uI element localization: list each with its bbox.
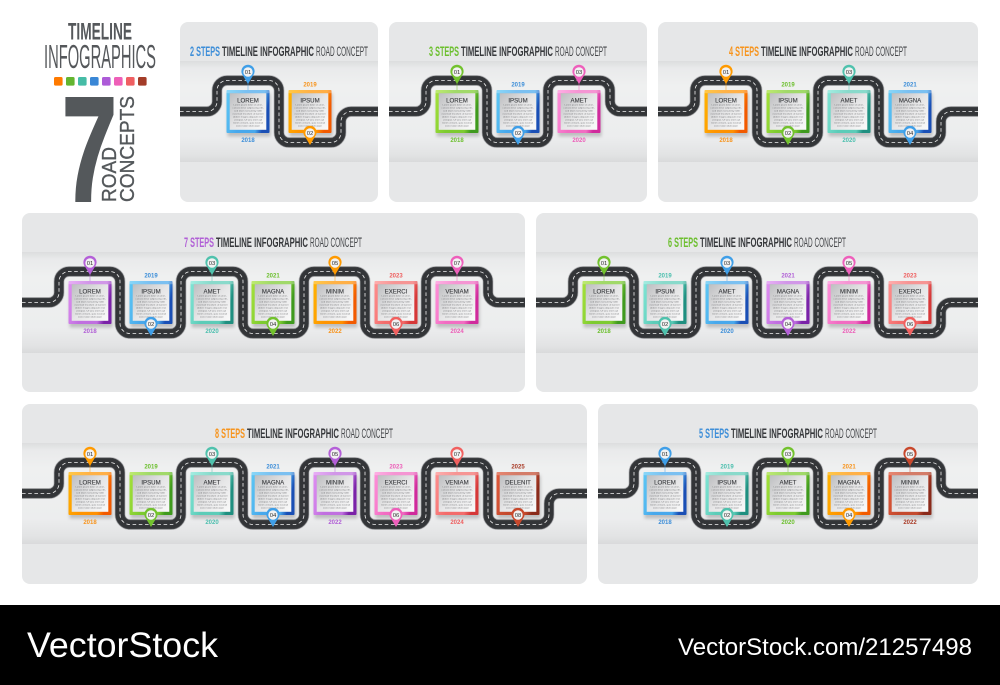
panel heading: 3 steps: 3 STEPS: [429, 43, 459, 59]
card: MINIM 2022: [828, 256, 872, 335]
panel heading: 8 steps: TIMELINE INFOGRAPHIC: [247, 425, 339, 441]
card: MINIM 2022: MINIM: [901, 480, 919, 486]
card: VENIAM 2024: VENIAM: [445, 288, 469, 296]
card: EXERCI 2023: [888, 273, 932, 336]
card: MAGNA 2021: [766, 273, 810, 336]
card: LOREM 2018: [436, 65, 480, 144]
panel heading: 5 steps: TIMELINE INFOGRAPHIC: [731, 425, 823, 441]
main heading block: [44, 18, 156, 233]
card: DELENIT 2025: DELENIT: [505, 480, 531, 486]
card: EXERCI 2023: 06: [393, 322, 400, 328]
card: IPSUM 2019: [130, 464, 174, 527]
card: AMET 2020: 03: [846, 70, 853, 76]
card: MINIM 2022: 05: [332, 261, 339, 267]
panel heading: 7 steps: 7 STEPS: [184, 234, 214, 250]
heading: TIMELINE: TIMELINE: [68, 18, 132, 46]
text: INFOGRAPHICS: [44, 38, 156, 75]
card: AMET 2020: [190, 447, 234, 526]
card: MAGNA 2021: 04: [270, 513, 277, 519]
card: MAGNA 2021: MAGNA: [777, 288, 800, 296]
card: LOREM 2018: LOREM: [593, 288, 615, 296]
big number 7: 7: [62, 66, 117, 233]
card: IPSUM 2019: 02: [148, 322, 154, 328]
card: AMET 2020: 2020: [781, 520, 795, 526]
card: IPSUM 2019: 2019: [144, 273, 158, 279]
card: MINIM 2022: 2022: [903, 520, 917, 526]
card: MAGNA 2021: [252, 273, 296, 336]
card: IPSUM 2019: 2019: [781, 82, 795, 88]
card: MAGNA 2021: [888, 82, 932, 145]
card: IPSUM 2019: IPSUM: [141, 480, 161, 486]
card: LOREM 2018: 01: [601, 261, 607, 267]
card: MINIM 2022: 05: [332, 452, 339, 458]
card: LOREM 2018: LOREM: [715, 98, 737, 104]
card: EXERCI 2023: 06: [393, 513, 400, 519]
card: MINIM 2022: 2022: [328, 329, 342, 335]
card: LOREM 2018: 2018: [658, 520, 672, 526]
panel: 5 steps: [598, 404, 978, 584]
card: EXERCI 2023: 2023: [389, 273, 403, 279]
panel: 8 steps: ROAD CONCEPT: [341, 425, 393, 441]
card: EXERCI 2023: EXERCI: [385, 288, 408, 296]
road: [598, 462, 978, 524]
card: AMET 2020: 03: [209, 261, 216, 267]
card: DELENIT 2025: 08: [515, 513, 522, 519]
card: AMET 2020: 03: [576, 70, 583, 76]
card: AMET 2020: AMET: [204, 288, 221, 296]
card: LOREM 2018: LOREM: [79, 480, 101, 486]
card: AMET 2020: AMET: [571, 98, 588, 104]
card: IPSUM 2019: [288, 82, 332, 145]
card: MINIM 2022: [314, 256, 358, 335]
card: AMET 2020: 03: [785, 452, 792, 458]
card: MAGNA 2021: 2021: [903, 82, 917, 88]
panel: 6 steps: [536, 213, 978, 392]
card: AMET 2020: AMET: [204, 480, 221, 486]
colour swatches: [54, 77, 147, 86]
card: MAGNA 2021: MAGNA: [262, 480, 285, 486]
card: AMET 2020: [766, 447, 810, 526]
card: MAGNA 2021: MAGNA: [262, 288, 285, 296]
panel heading: 4 steps: TIMELINE INFOGRAPHIC: [761, 43, 853, 59]
panel: 4 steps: ROAD CONCEPT: [855, 43, 907, 59]
card: IPSUM 2019: 2019: [511, 82, 525, 88]
card: IPSUM 2019: IPSUM: [300, 98, 320, 104]
panel heading: 4 steps: 4 STEPS: [729, 43, 759, 59]
card: IPSUM 2019: [130, 273, 174, 336]
panel heading: 5 steps: 5 STEPS: [699, 425, 729, 441]
card: LOREM 2018: 01: [662, 452, 668, 458]
card: LOREM 2018: 2018: [719, 138, 733, 144]
card: MINIM 2022: MINIM: [326, 480, 344, 486]
card: LOREM 2018: 2018: [83, 329, 97, 335]
card: IPSUM 2019: 02: [148, 513, 154, 519]
footer url: VectorStock.com/21257498: [678, 634, 972, 661]
card: MAGNA 2021: 04: [270, 322, 277, 328]
card: LOREM 2018: [582, 256, 626, 335]
card: IPSUM 2019: 02: [662, 322, 668, 328]
card: AMET 2020: 2020: [205, 329, 219, 335]
card: AMET 2020: [706, 256, 750, 335]
road: [536, 272, 978, 334]
card: MINIM 2022: MINIM: [840, 288, 858, 296]
panel heading: 8 steps: 8 STEPS: [215, 425, 245, 441]
card: IPSUM 2019: 2019: [303, 82, 317, 88]
card: MINIM 2022: [314, 447, 358, 526]
card: LOREM 2018: [704, 65, 748, 144]
panel: 8 steps: [22, 404, 587, 584]
card: LOREM 2018: LOREM: [446, 98, 468, 104]
card: EXERCI 2023: 2023: [389, 464, 403, 470]
card: LOREM 2018: [68, 447, 112, 526]
panel: 7 steps: [22, 213, 525, 392]
card: MAGNA 2021: 04: [785, 322, 792, 328]
card: AMET 2020: 2020: [842, 138, 856, 144]
card: AMET 2020: 2020: [572, 138, 586, 144]
panel: 2 steps: [180, 22, 378, 202]
card: LOREM 2018: LOREM: [79, 288, 101, 296]
panel: 2 steps: ROAD CONCEPT: [316, 43, 368, 59]
road: [22, 272, 525, 334]
panel heading: 3 steps: TIMELINE INFOGRAPHIC: [461, 43, 553, 59]
card: IPSUM 2019: 02: [785, 131, 791, 137]
card: VENIAM 2024: 2024: [450, 520, 464, 526]
card: EXERCI 2023: EXERCI: [385, 480, 408, 486]
card: LOREM 2018: [226, 65, 270, 144]
card: IPSUM 2019: IPSUM: [508, 98, 528, 104]
card: MAGNA 2021: 2021: [842, 464, 856, 470]
card: AMET 2020: 2020: [720, 329, 734, 335]
card: IPSUM 2019: 2019: [720, 464, 734, 470]
card: MINIM 2022: 05: [846, 261, 853, 267]
card: IPSUM 2019: [706, 464, 750, 527]
road: [389, 80, 647, 142]
card: IPSUM 2019: IPSUM: [778, 98, 798, 104]
vertical text: ROAD: ROAD: [98, 147, 121, 202]
card: LOREM 2018: 2018: [241, 138, 255, 144]
card: MAGNA 2021: 2021: [266, 273, 280, 279]
card: IPSUM 2019: [766, 82, 810, 145]
card: MINIM 2022: [888, 447, 932, 526]
footer bar: [0, 605, 1000, 685]
card: AMET 2020: 2020: [205, 520, 219, 526]
panel heading: 6 steps: TIMELINE INFOGRAPHIC: [700, 234, 792, 250]
card: MINIM 2022: MINIM: [326, 288, 344, 296]
card: IPSUM 2019: 02: [307, 131, 313, 137]
card: IPSUM 2019: [644, 273, 688, 336]
card: AMET 2020: [558, 65, 602, 144]
panel: 3 steps: ROAD CONCEPT: [555, 43, 607, 59]
card: LOREM 2018: LOREM: [654, 480, 676, 486]
card: LOREM 2018: [644, 447, 688, 526]
panel: 3 steps: [389, 22, 647, 202]
card: IPSUM 2019: 2019: [658, 273, 672, 279]
card: MINIM 2022: 05: [907, 452, 914, 458]
card: IPSUM 2019: 2019: [144, 464, 158, 470]
card: AMET 2020: AMET: [780, 480, 797, 486]
card: EXERCI 2023: 06: [907, 322, 914, 328]
card: EXERCI 2023: [374, 464, 418, 527]
card: AMET 2020: 03: [724, 261, 731, 267]
card: AMET 2020: 03: [209, 452, 216, 458]
card: MINIM 2022: 2022: [842, 329, 856, 335]
card: LOREM 2018: 2018: [83, 520, 97, 526]
card: MAGNA 2021: 04: [907, 131, 914, 137]
road: [180, 80, 378, 142]
card: LOREM 2018: 01: [723, 70, 729, 76]
card: MAGNA 2021: [828, 464, 872, 527]
card: MAGNA 2021: [252, 464, 296, 527]
card: AMET 2020: [828, 65, 872, 144]
card: IPSUM 2019: IPSUM: [141, 288, 161, 296]
card: EXERCI 2023: [374, 273, 418, 336]
card: IPSUM 2019: IPSUM: [717, 480, 737, 486]
card: IPSUM 2019: 02: [724, 513, 730, 519]
card: LOREM 2018: 01: [245, 70, 251, 76]
panel heading: 2 steps: TIMELINE INFOGRAPHIC: [222, 43, 314, 59]
card: VENIAM 2024: [436, 256, 480, 335]
panel: 4 steps: [658, 22, 978, 202]
card: VENIAM 2024: 07: [454, 261, 460, 267]
card: MAGNA 2021: MAGNA: [838, 480, 861, 486]
footer brand: VectorStock: [27, 626, 219, 665]
card: MINIM 2022: 2022: [328, 520, 342, 526]
card: EXERCI 2023: EXERCI: [899, 288, 922, 296]
panel: 6 steps: ROAD CONCEPT: [794, 234, 846, 250]
card: AMET 2020: AMET: [719, 288, 736, 296]
panel: 5 steps: ROAD CONCEPT: [825, 425, 877, 441]
panel heading: 2 steps: 2 STEPS: [190, 43, 220, 59]
card: VENIAM 2024: [436, 447, 480, 526]
card: LOREM 2018: LOREM: [237, 98, 259, 104]
card: MAGNA 2021: MAGNA: [899, 98, 922, 104]
vertical text: CONCEPTS: CONCEPTS: [116, 96, 139, 202]
card: MAGNA 2021: 2021: [266, 464, 280, 470]
card: IPSUM 2019: [496, 82, 540, 145]
card: IPSUM 2019: 02: [515, 131, 521, 137]
card: AMET 2020: AMET: [841, 98, 858, 104]
card: DELENIT 2025: 2025: [511, 464, 525, 470]
card: EXERCI 2023: 2023: [903, 273, 917, 279]
card: LOREM 2018: 2018: [450, 138, 464, 144]
card: IPSUM 2019: IPSUM: [655, 288, 675, 296]
panel heading: 7 steps: TIMELINE INFOGRAPHIC: [216, 234, 308, 250]
card: LOREM 2018: 01: [454, 70, 460, 76]
card: LOREM 2018: 01: [87, 261, 93, 267]
card: LOREM 2018: 2018: [597, 329, 611, 335]
card: VENIAM 2024: VENIAM: [445, 480, 469, 486]
card: MAGNA 2021: 04: [846, 513, 853, 519]
card: VENIAM 2024: 07: [454, 452, 460, 458]
card: DELENIT 2025: [496, 464, 540, 527]
card: LOREM 2018: [68, 256, 112, 335]
card: LOREM 2018: 01: [87, 452, 93, 458]
panel heading: 6 steps: 6 STEPS: [668, 234, 698, 250]
card: AMET 2020: [190, 256, 234, 335]
card: MAGNA 2021: 2021: [781, 273, 795, 279]
road: [22, 462, 587, 524]
road: [658, 80, 978, 142]
panel: 7 steps: ROAD CONCEPT: [310, 234, 362, 250]
card: VENIAM 2024: 2024: [450, 329, 464, 335]
